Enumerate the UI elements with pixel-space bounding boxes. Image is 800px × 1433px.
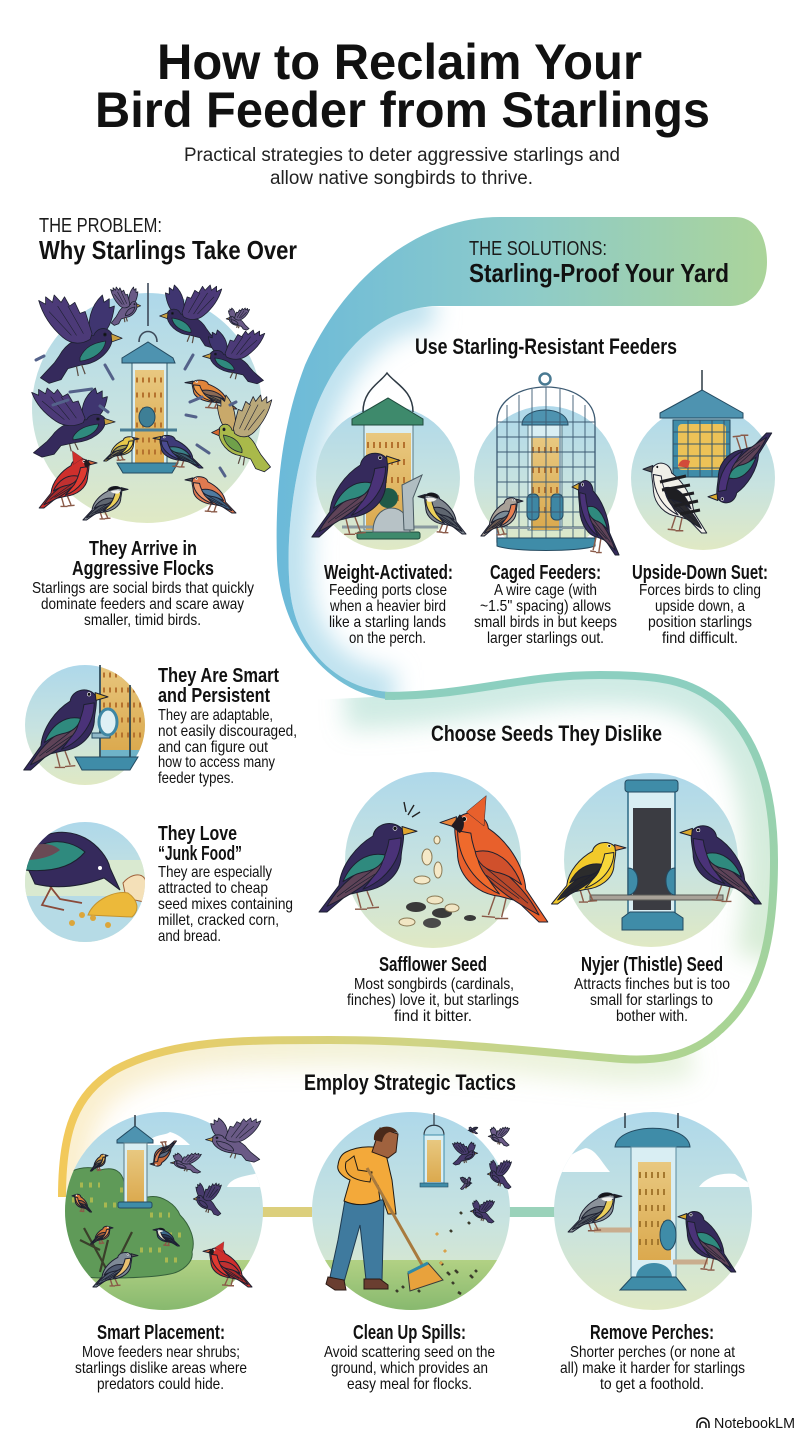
text: weight-activated: when a heavier bird [329, 598, 446, 615]
text: caged feeders: small birds in but keeps [474, 614, 617, 631]
text: they are smart and persistent: feeder types. [158, 770, 234, 787]
illustration: remove perches [552, 1112, 755, 1310]
text: upside-down suet [632, 562, 768, 647]
text: clean up spills [324, 1322, 495, 1393]
panel: strategic tactics [60, 1070, 755, 1393]
text: safflower seed [347, 954, 519, 1025]
text: they arrive in aggressive flocks: They Arrive in [89, 538, 197, 560]
heading: the problem: Why Starlings Take Over [39, 235, 297, 265]
text: they arrive in aggressive flocks: smaller, timid birds. [84, 612, 201, 629]
text: they arrive in aggressive flocks [32, 538, 254, 629]
heading: the problem: THE PROBLEM: [39, 215, 162, 237]
text: safflower seed: Safflower Seed [379, 954, 487, 976]
panel: the problem [20, 215, 297, 946]
heading: Employ Strategic Tactics [304, 1070, 516, 1095]
text: they arrive in aggressive flocks: Aggressive Flocks [72, 558, 214, 580]
text: they are smart and persistent: and can figure out [158, 739, 268, 756]
solutions ribbon [62, 217, 774, 1217]
text: they are smart and persistent: They are adaptable, [158, 707, 273, 724]
text: upside-down suet: upside down, a [655, 598, 745, 615]
illustration: starling at feeder port [24, 660, 151, 785]
text: safflower seed: find it bitter. [394, 1008, 472, 1025]
text: upside-down suet: position starlings [648, 614, 752, 631]
title: How to Reclaim Your [157, 34, 642, 90]
text: clean up spills: ground, which provides an [331, 1360, 488, 1377]
heading: the solutions [469, 238, 729, 288]
text: they love junk food: and bread. [158, 928, 221, 945]
illustration: nyjer seed feeder [552, 773, 761, 947]
text: they love junk food [158, 823, 293, 945]
text: safflower seed: finches) love it, but starlings [347, 992, 519, 1009]
text: weight-activated: on the perch. [349, 630, 426, 647]
text: they are smart and persistent [158, 665, 297, 787]
text: remove perches: to get a foothold. [600, 1376, 704, 1393]
illustration: smart placement [65, 1112, 263, 1310]
text: caged feeders: larger starlings out. [487, 630, 604, 647]
illustration: safflower seed [319, 772, 548, 948]
illustration: upside-down suet feeder [631, 370, 775, 550]
text: smart placement: Smart Placement: [97, 1322, 225, 1344]
panel: seeds they dislike [319, 721, 761, 1025]
title [95, 34, 710, 138]
text: caged feeders [474, 562, 617, 647]
text: they love junk food: They are especially [158, 864, 272, 881]
text: safflower seed: Most songbirds (cardinals, [354, 976, 514, 993]
text: caged feeders: ~1.5" spacing) allows [480, 598, 611, 615]
text: they arrive in aggressive flocks: Starlings are social birds that quickly [32, 580, 254, 597]
illustration: clean up spills [305, 1112, 515, 1320]
text: they love junk food: millet, cracked corn, [158, 912, 279, 929]
subtitle [184, 145, 620, 189]
text: smart placement: starlings dislike areas where [75, 1360, 247, 1377]
heading: Use Starling-Resistant Feeders [415, 334, 677, 359]
text: caged feeders: Caged Feeders: [490, 562, 601, 584]
text: nyjer seed: bother with. [616, 1008, 688, 1025]
panel: starling-resistant feeders [312, 334, 775, 647]
heading: the solutions: Starling-Proof Your Yard [469, 258, 729, 288]
text: they love junk food: “Junk Food” [158, 843, 242, 865]
text: nyjer seed: Attracts finches but is too [574, 976, 730, 993]
text: smart placement: Move feeders near shrubs; [82, 1344, 240, 1361]
illustration: starling eating junk food [25, 822, 145, 942]
subtitle: allow native songbirds to thrive. [270, 168, 533, 189]
pale background washes [62, 307, 774, 1197]
text: clean up spills: easy meal for flocks. [347, 1376, 472, 1393]
logo: NotebookLM: NotebookLM [714, 1415, 795, 1432]
title: Bird Feeder from Starlings [95, 82, 710, 138]
text: they arrive in aggressive flocks: dominate feeders and scare away [41, 596, 244, 613]
text: they love junk food: seed mixes containing [158, 896, 293, 913]
text: they are smart and persistent: They Are Smart [158, 665, 279, 687]
text: they are smart and persistent: and Persistent [158, 685, 270, 707]
text: remove perches: Remove Perches: [590, 1322, 714, 1344]
text: they love junk food: They Love [158, 823, 237, 845]
text: they are smart and persistent: how to access many [158, 754, 275, 771]
text: remove perches [560, 1322, 745, 1393]
text: nyjer seed [574, 954, 730, 1025]
subtitle: Practical strategies to deter aggressive starlings and [184, 145, 620, 166]
text: weight-activated [324, 562, 453, 647]
text: weight-activated: Weight-Activated: [324, 562, 453, 584]
text: they love junk food: attracted to cheap [158, 880, 268, 897]
illustration: weight-activated feeder [312, 373, 466, 550]
text: clean up spills: Avoid scattering seed on the [324, 1344, 495, 1361]
text: nyjer seed: small for starlings to [590, 992, 713, 1009]
text: smart placement: predators could hide. [97, 1376, 224, 1393]
heading: the solutions: THE SOLUTIONS: [469, 238, 607, 260]
illustration: caged feeder [474, 374, 619, 555]
text: weight-activated: like a starling lands [329, 614, 446, 631]
text: remove perches: all) make it harder for starlings [560, 1360, 745, 1377]
text: they are smart and persistent: not easily discouraged, [158, 723, 297, 740]
text: clean up spills: Clean Up Spills: [353, 1322, 466, 1344]
text: upside-down suet: find difficult. [662, 630, 738, 647]
heading: Choose Seeds They Dislike [431, 721, 662, 746]
illustration: starling flock around feeder [32, 283, 272, 523]
text: remove perches: Shorter perches (or none at [570, 1344, 735, 1361]
text: weight-activated: Feeding ports close [329, 582, 447, 599]
text: caged feeders: A wire cage (with [494, 582, 597, 599]
text: nyjer seed: Nyjer (Thistle) Seed [581, 954, 723, 976]
text: smart placement [75, 1322, 247, 1393]
heading: the problem [39, 215, 297, 265]
text: upside-down suet: Forces birds to cling [639, 582, 761, 599]
